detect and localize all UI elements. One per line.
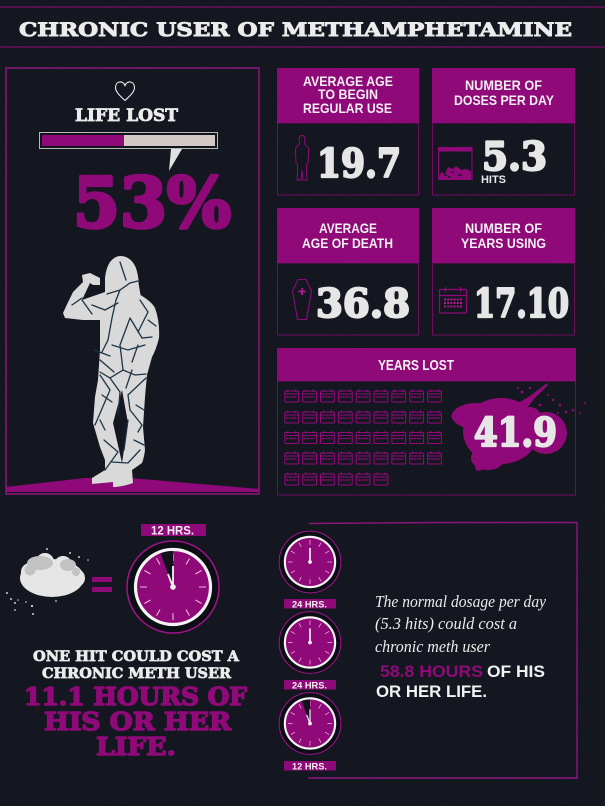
card: age of death: [277, 208, 419, 335]
text: normal dosage script: chronic meth user: [375, 637, 490, 656]
text: one hit: CHRONIC METH USER: [42, 666, 232, 682]
figure: hooded person with cracks: [63, 256, 159, 487]
card: age to begin: [277, 68, 419, 195]
clock label: 24 HRS.: [292, 680, 327, 692]
card: years using: [432, 208, 575, 335]
floor shadow: [6, 478, 259, 492]
card heading: AGE OF DEATH: [302, 235, 393, 251]
value: 53%: 53%: [73, 163, 231, 244]
card heading: [302, 220, 393, 251]
ink splat: [452, 383, 586, 471]
text: 58.8 hours: 58.8 HOURS: [380, 663, 483, 681]
clock face: [127, 541, 219, 633]
icon: person: [296, 136, 308, 180]
equals sign: [92, 577, 112, 592]
text: 11.1 hours: 11.1 HOURS OF: [24, 682, 247, 711]
panel: life lost: [6, 68, 259, 494]
card heading: REGULAR USE: [303, 100, 392, 116]
icon: heart: [116, 82, 134, 100]
value: 5.3: [482, 134, 547, 180]
icon: coffin: [292, 280, 312, 320]
icon: box of crystals: [438, 147, 472, 180]
calendar grid: [285, 390, 441, 485]
heading: YEARS LOST: [378, 357, 454, 374]
clock: 24 hours first: [279, 531, 341, 610]
clock: 24 hours second: [279, 612, 341, 692]
text: normal dosage script: The normal dosage per day: [375, 592, 546, 611]
text: normal dosage script: [375, 592, 546, 656]
icon: powder pile: [6, 548, 89, 615]
card heading: NUMBER OF: [465, 77, 542, 93]
text: normal dosage script: (5.3 hits) could cost a: [375, 614, 517, 633]
clock label: 12 HRS.: [151, 526, 194, 538]
value: 41.9: [474, 410, 557, 456]
card heading: [461, 220, 546, 251]
card heading: [303, 73, 393, 116]
card: doses per day: [432, 68, 575, 195]
title: CHRONIC USER OF METHAMPHETAMINE: [19, 19, 572, 41]
text: one hit: ONE HIT COULD COST A: [33, 649, 240, 665]
value: 36.8: [316, 281, 410, 327]
text: 58.8 hours: OR HER LIFE.: [376, 683, 487, 701]
text: 11.1 hours: LIFE.: [96, 732, 176, 761]
panel: years lost: [277, 348, 586, 495]
text: 11.1 hours: [24, 682, 247, 761]
clock: 12 hours small: [279, 693, 341, 772]
card heading: TO BEGIN: [318, 86, 378, 102]
unit: HITS: [481, 174, 506, 186]
card heading: YEARS USING: [461, 235, 546, 251]
progress bar: [40, 132, 218, 148]
text: 58.8 hours: [376, 663, 545, 701]
pointer: [169, 149, 182, 171]
panel frame: normal dosage: [308, 522, 577, 778]
card heading: AVERAGE AGE: [303, 73, 393, 89]
card heading: DOSES PER DAY: [454, 92, 555, 108]
icon: calendar: [440, 287, 466, 313]
text: one hit: [33, 649, 240, 682]
clock label: 12 HRS.: [292, 762, 327, 772]
value: 19.7: [317, 141, 401, 187]
clock label: 24 HRS.: [292, 600, 327, 610]
value: 17.10: [474, 281, 569, 327]
text: 58.8 hours: OF HIS: [487, 663, 545, 681]
clock: 12 hours: [127, 524, 219, 633]
title: [0, 7, 605, 47]
text: 11.1 hours: HIS OR HER: [44, 707, 232, 736]
card heading: AVERAGE: [319, 220, 377, 236]
card heading: [454, 77, 555, 108]
card heading: NUMBER OF: [465, 220, 542, 236]
heading: life lost: LIFE LOST: [75, 106, 179, 125]
